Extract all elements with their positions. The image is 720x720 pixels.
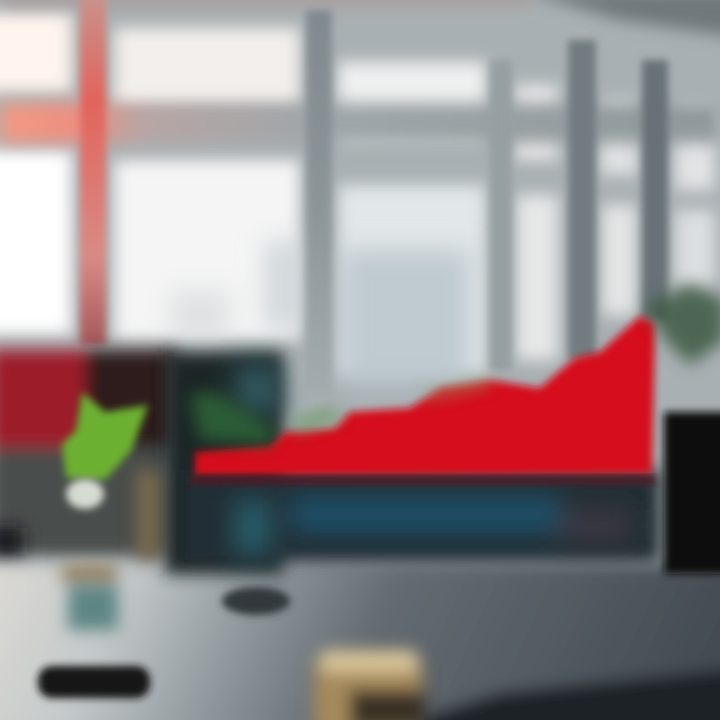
black object foreground [38,666,150,698]
dark oval object [222,587,290,615]
chart baseline shadow [190,476,655,485]
red shelf at left [0,350,175,556]
red area chart [195,316,655,476]
right dark device [664,412,720,574]
window horizontal frame [0,0,720,143]
coffee cup [314,650,425,720]
wooden post [0,470,159,560]
table surface [0,565,720,720]
plant behind chart [190,285,720,445]
green plant [62,392,148,480]
laptop screen glow [235,365,630,555]
laptop body [165,352,660,574]
white plant pot [66,479,104,509]
window panes [0,12,715,375]
city haze through window [170,240,470,390]
small teal jar [62,565,118,630]
window vertical frame [80,0,668,395]
